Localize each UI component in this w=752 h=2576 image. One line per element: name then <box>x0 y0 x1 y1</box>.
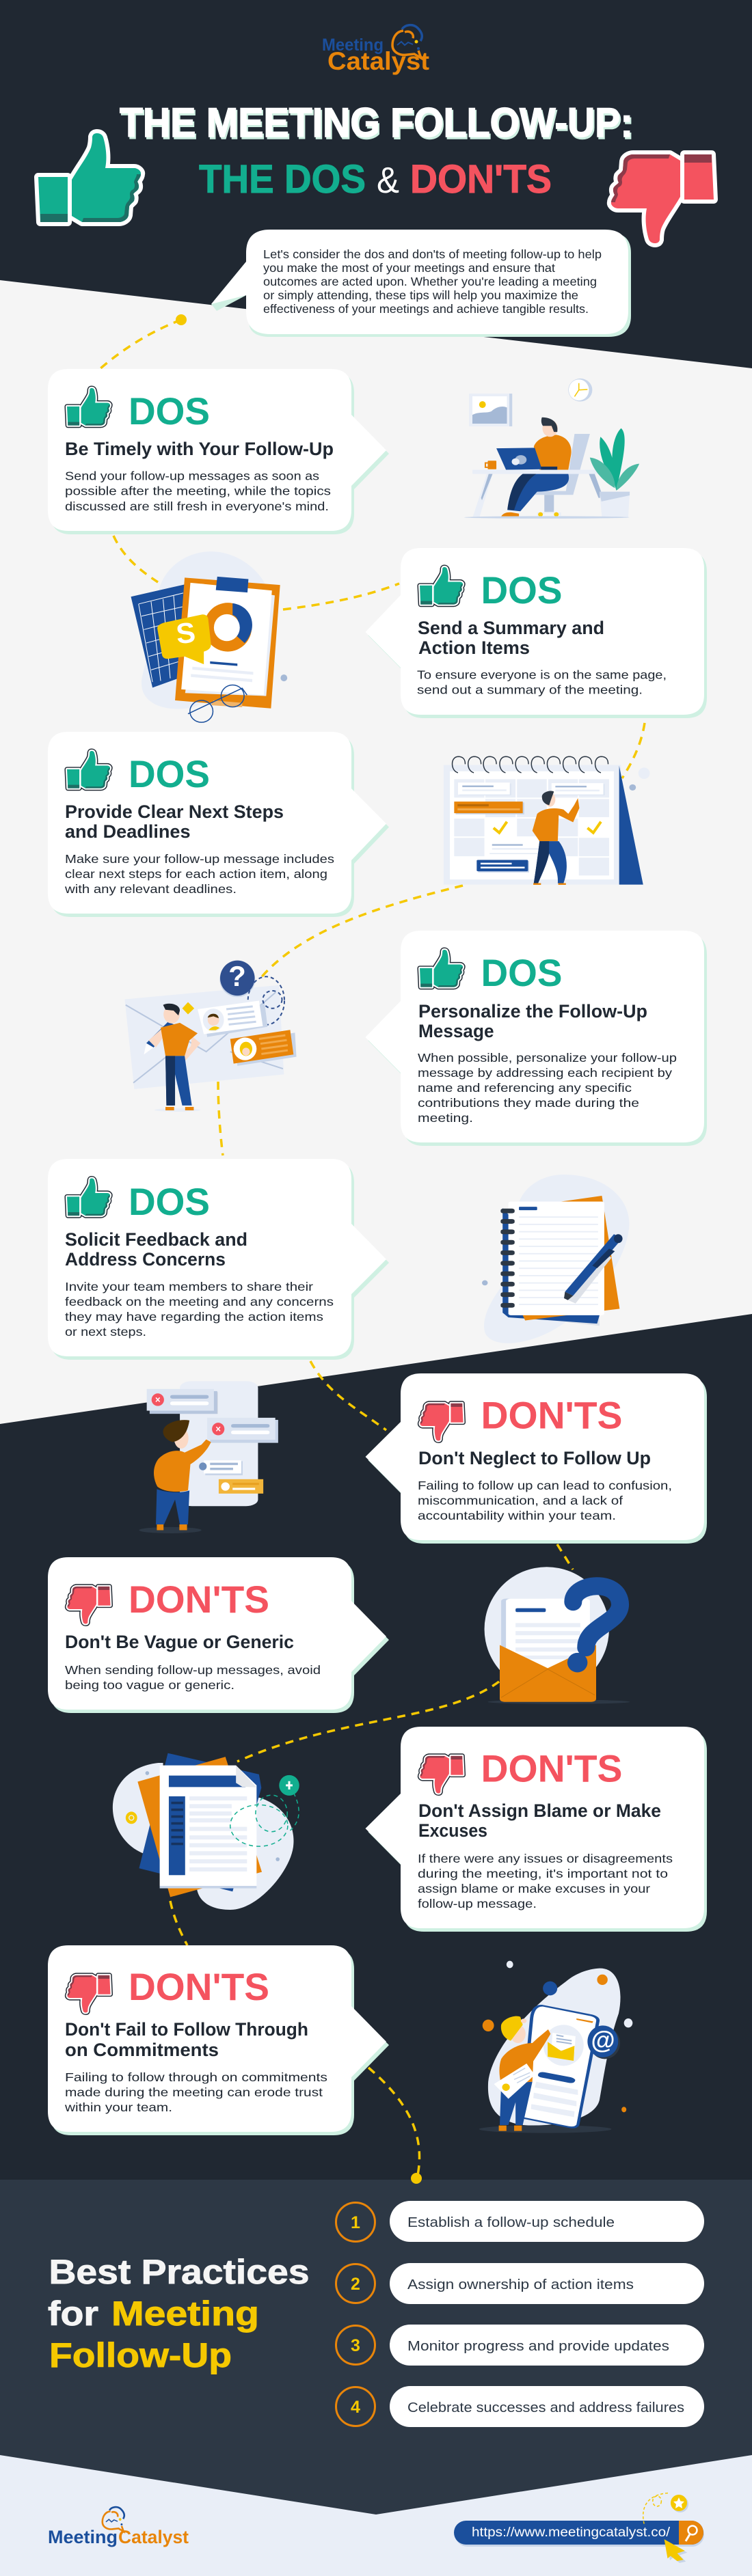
icon: thumbs up <box>420 950 463 987</box>
body text: miscommunication, and a lack of <box>418 1494 623 1507</box>
illustration: envelope with question mark <box>485 1567 630 1704</box>
body text: Invite your team members to share their <box>65 1280 313 1293</box>
body text: made during the meeting can erode trust <box>65 2085 323 2099</box>
panel: dont 4 follow through <box>48 1945 389 2135</box>
illustration: clipboard with chart <box>131 551 287 722</box>
body text: Make sure your follow-up message includes <box>65 852 334 866</box>
icon: cursor and star <box>643 2493 688 2563</box>
label: dos: DOS <box>129 1180 210 1223</box>
body text: possible after the meeting, while the topics <box>65 484 331 497</box>
logo: top Meeting Catalyst: Meeting <box>322 36 384 55</box>
heading <box>418 1800 661 1841</box>
heading <box>418 618 604 658</box>
heading: Message <box>418 1021 494 1041</box>
body text: message by addressing each recipient by <box>418 1066 672 1080</box>
panel: best practices section with chevron <box>0 2180 752 2515</box>
list item 1 <box>336 2201 704 2242</box>
heading: Address Concerns <box>65 1249 226 1270</box>
illustration: envelope with person <box>124 960 297 1112</box>
title: line one: THE MEETING FOLLOW-UP: <box>120 100 633 146</box>
body text: clear next steps for each action item, along <box>65 867 327 881</box>
label: donts: DON'TS <box>129 1578 269 1621</box>
logo: top Meeting Catalyst <box>322 25 429 75</box>
label: dos: DOS <box>481 568 562 612</box>
heading: best practices <box>48 2253 310 2374</box>
body text: Send your follow-up messages as soon as <box>65 469 319 482</box>
heading: Don't Fail to Follow Through <box>65 2019 308 2040</box>
label: dos: DOS <box>129 752 210 795</box>
icon: thumbs up <box>67 1179 110 1216</box>
heading: Don't Be Vague or Generic <box>65 1632 294 1652</box>
body text: name and referencing any specific <box>418 1081 632 1095</box>
body text <box>418 1852 673 1910</box>
heading: Personalize the Follow-Up <box>418 1001 647 1022</box>
body text <box>418 1051 677 1125</box>
body text <box>64 852 334 896</box>
body text: When possible, personalize your follow-up <box>418 1051 677 1065</box>
list item 2 <box>336 2263 704 2304</box>
body text: assign blame or make excuses in your <box>418 1882 650 1895</box>
body text: during the meeting, it's important not to <box>418 1867 668 1880</box>
panel: dont 1 neglect <box>365 1373 707 1544</box>
icon: thumbs down <box>420 1403 463 1440</box>
icon: thumbs down <box>420 1756 463 1793</box>
body text <box>417 668 667 697</box>
heading: on Commitments <box>65 2040 219 2060</box>
label: donts: DON'TS <box>481 1746 622 1790</box>
body text: discussed are still fresh in everyone's mind. <box>65 499 329 513</box>
body text: accountability within your team. <box>418 1509 616 1522</box>
list item 1: Establish a follow-up schedule <box>407 2215 615 2230</box>
body text: Failing to follow up can lead to confusion, <box>418 1479 672 1492</box>
callout: intro bubble: or simply attending, these tips will help you maximize the <box>263 288 578 302</box>
body text: follow-up message. <box>418 1897 537 1910</box>
heading: best practices: Follow-Up <box>49 2336 232 2374</box>
label: dos: DOS <box>481 951 562 994</box>
heading: Be Timely with Your Follow-Up <box>65 439 334 459</box>
body text: with any relevant deadlines. <box>64 882 237 896</box>
body text <box>65 1663 321 1692</box>
title: line two: DON'TS <box>410 157 552 202</box>
heading: Don't Assign Blame or Make <box>418 1800 661 1821</box>
heading <box>65 1229 247 1270</box>
title: line two <box>199 157 552 202</box>
icon: thumbs up <box>67 751 110 789</box>
url search bar <box>454 2493 704 2563</box>
body text: within your team. <box>64 2100 172 2114</box>
body text: To ensure everyone is on the same page, <box>417 668 667 682</box>
heading: Solicit Feedback and <box>65 1229 247 1250</box>
icon: large thumbs up <box>38 133 141 222</box>
body text <box>418 1479 672 1522</box>
icon: thumbs down <box>67 1975 110 2012</box>
panel: do 2 summary <box>365 548 707 718</box>
body text <box>65 469 331 513</box>
icon: thumbs up <box>67 388 110 426</box>
callout: intro bubble: effectiveness of your meetings and achieve tangible results. <box>263 302 589 316</box>
heading <box>418 1001 647 1041</box>
heading: Action Items <box>418 638 530 658</box>
illustration: stacked documents <box>113 1753 299 1910</box>
heading <box>65 801 284 842</box>
body text: When sending follow-up messages, avoid <box>65 1663 321 1677</box>
panel: do 5 feedback <box>48 1159 389 1360</box>
list item 1: 1 <box>351 2213 360 2232</box>
logo: top Meeting Catalyst: Catalyst <box>327 47 429 75</box>
body text: they may have regarding the action items <box>65 1310 323 1324</box>
url search bar: https://www.meetingcatalyst.co/ <box>472 2525 671 2540</box>
list item 2: Assign ownership of action items <box>407 2277 634 2292</box>
heading: best practices: Meeting <box>111 2294 259 2333</box>
logo: footer Meeting Catalyst: Meeting <box>48 2527 118 2547</box>
body text: If there were any issues or disagreements <box>418 1852 673 1865</box>
panel: dont 2 vague <box>48 1557 389 1713</box>
heading: and Deadlines <box>65 821 190 842</box>
heading <box>65 2019 308 2060</box>
heading: Don't Neglect to Follow Up <box>418 1448 651 1468</box>
title: line two: THE DOS <box>199 157 366 202</box>
heading: Provide Clear Next Steps <box>65 801 284 822</box>
icon: thumbs down <box>67 1587 110 1623</box>
list item 3 <box>336 2325 704 2366</box>
background: footer <box>0 2455 752 2576</box>
body text: meeting. <box>418 1111 473 1125</box>
list item 3: Monitor progress and provide updates <box>407 2339 669 2354</box>
illustration: clipboard with chart: S <box>174 616 197 650</box>
label: donts: DON'TS <box>129 1965 269 2008</box>
heading: Excuses <box>418 1820 487 1841</box>
connector: yellow dashed path <box>94 314 645 2184</box>
panel: do 4 personalize <box>365 931 707 1146</box>
panel: do 3 next steps <box>48 732 389 917</box>
logo: footer Meeting Catalyst <box>48 2507 189 2547</box>
body text: feedback on the meeting and any concerns <box>65 1295 334 1308</box>
label: dos: DOS <box>129 389 210 433</box>
illustration: envelope with person: ? <box>228 960 246 992</box>
label: donts: DON'TS <box>481 1394 622 1436</box>
list item 4: Celebrate successes and address failures <box>407 2400 684 2415</box>
list item 4 <box>336 2386 704 2427</box>
illustration: person with phone and email: @ <box>591 2026 615 2054</box>
heading: best practices: Best Practices <box>49 2253 310 2291</box>
heading: best practices: for <box>48 2294 98 2333</box>
heading: Send a Summary and <box>418 618 604 638</box>
panel: dont 3 blame <box>365 1727 707 1932</box>
illustration: notebook and pen <box>482 1175 629 1343</box>
illustration: person with checklist <box>139 1381 278 1533</box>
icon: large thumbs down <box>611 154 714 243</box>
illustration: calendar with person <box>444 756 650 885</box>
illustration: person at desk <box>464 379 639 519</box>
background: light dos section <box>0 280 752 1424</box>
body text: contributions they made during the <box>418 1096 639 1110</box>
body text: send out a summary of the meeting. <box>417 683 643 697</box>
body text: or next steps. <box>65 1325 146 1339</box>
title: line two: & <box>377 160 399 201</box>
list item 4: 4 <box>351 2398 360 2417</box>
body text: being too vague or generic. <box>65 1678 234 1692</box>
panel: do 1 timely <box>48 369 389 534</box>
callout: intro bubble: you make the most of your meetings and ensure that <box>263 261 555 275</box>
logo: footer Meeting Catalyst: Catalyst <box>118 2527 189 2547</box>
callout: intro bubble <box>211 230 631 337</box>
body text: Failing to follow through on commitments <box>65 2070 327 2084</box>
list item 2: 2 <box>351 2275 360 2294</box>
title: line one: THE MEETING FOLLOW-UP: <box>121 102 634 148</box>
body text <box>64 2070 327 2114</box>
callout: intro bubble: Let's consider the dos and don'ts of meeting follow-up to help <box>263 247 602 261</box>
illustration: person with phone and email <box>479 1961 632 2133</box>
callout: intro bubble: outcomes are acted upon. Whether you're leading a meeting <box>263 275 597 288</box>
list item 3: 3 <box>351 2336 360 2355</box>
icon: thumbs up <box>420 567 463 605</box>
body text <box>65 1280 334 1339</box>
